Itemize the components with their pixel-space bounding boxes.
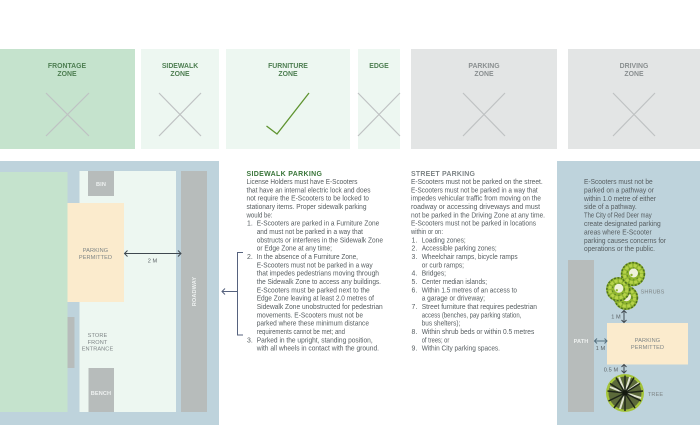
- arrow: 0.5 m tree clearance: 0.5 M: [604, 368, 618, 374]
- text block: sidewalk parking: movements. E-Scooters must not be: [257, 312, 363, 319]
- text block: street parking: Within 1.5 metres of an access to: [422, 287, 517, 294]
- text block: sidewalk parking: and must not be parked in a way that: [257, 229, 363, 236]
- text block: street parking: roadway or accessing driveways and must: [411, 204, 540, 211]
- text block: sidewalk parking: the Sidewalk Zone to access any buildings.: [257, 279, 381, 286]
- zone: parking: PARKING: [468, 63, 500, 70]
- text block: street parking: Bridges;: [422, 271, 446, 278]
- text block: street parking: Street furniture that requires pedestrian: [422, 304, 537, 311]
- heading: street parking: STREET PARKING: [411, 171, 476, 178]
- text block: street parking: within or on:: [410, 229, 443, 236]
- text block: street parking: 6.: [412, 287, 417, 294]
- bench: [88, 368, 114, 412]
- text block: sidewalk parking: Sidewalk Zone unobstructed for pedestrian: [257, 304, 383, 311]
- zone: furniture: ZONE: [278, 71, 298, 78]
- text block: street parking: Loading zones;: [422, 237, 466, 244]
- zone: sidewalk: [141, 49, 219, 149]
- text block: street parking: 7.: [412, 304, 417, 311]
- text block: sidewalk parking: Parked in the upright, standing position,: [257, 337, 373, 344]
- text block: street parking: Wheelchair ramps, bicycle ramps: [422, 254, 518, 261]
- text block: sidewalk parking: parked where these minimum distance: [257, 321, 369, 328]
- text block: sidewalk parking: E-Scooters are parked in a Furniture Zone: [257, 221, 379, 228]
- text block: pathway rules: parked on a pathway or: [584, 187, 655, 194]
- arrow: 2 m clearance: [124, 250, 181, 264]
- arrow: 2 m clearance: 2 M: [148, 258, 158, 264]
- zone: driving: DRIVING: [620, 63, 648, 70]
- bin: BIN: [96, 182, 106, 188]
- text block: street parking: not be parked in the Driving Zone at any time.: [411, 212, 545, 219]
- zone: frontage: FRONTAGE: [48, 63, 86, 70]
- text block: sidewalk parking: 1.: [247, 221, 253, 228]
- text block: sidewalk parking: 2.: [247, 254, 253, 261]
- text block: street parking: 3.: [412, 254, 417, 261]
- text block: sidewalk parking: License Holders must have E-Scooters: [246, 179, 358, 186]
- text block: pathway rules: within 1.0 metre of either: [583, 196, 657, 203]
- text block: pathway rules: areas where E-Scooter: [584, 229, 652, 236]
- bench: BENCH: [91, 391, 111, 397]
- text block: sidewalk parking: obstructs or interferes in the Sidewalk Zone: [257, 237, 383, 244]
- parking permitted area: PERMITTED: [631, 345, 664, 351]
- text block: sidewalk parking: or Edge Zone at any time;: [257, 246, 332, 253]
- arrow: bracket to diagram: [222, 252, 243, 335]
- arrow: 1 m path clearance: [594, 338, 607, 352]
- panel: sidewalk parking diagram: [0, 161, 219, 425]
- text block: street parking: of trees; or: [422, 337, 450, 344]
- text block: sidewalk parking: stationary items. Proper sidewalk parking: [246, 204, 367, 211]
- text block: pathway rules: E-Scooters must not be: [584, 179, 653, 186]
- zone: edge: EDGE: [369, 63, 389, 70]
- text block: street parking: Center median islands;: [422, 279, 487, 286]
- text block: street parking: 5.: [412, 279, 417, 286]
- roadway: [181, 171, 207, 412]
- text block: pathway rules: [583, 179, 667, 253]
- text block: sidewalk parking: In the absence of a Furniture Zone,: [257, 254, 358, 261]
- zone: driving: ZONE: [624, 71, 644, 78]
- text block: pathway rules: create designated parking: [584, 221, 661, 228]
- parking permitted area: [607, 323, 688, 364]
- text block: sidewalk parking: [246, 171, 383, 353]
- text block: street parking: 2.: [412, 246, 417, 253]
- text block: street parking: bus shelters);: [422, 321, 460, 328]
- store front entrance label: [82, 333, 113, 352]
- zone: furniture: FURNITURE: [268, 63, 308, 70]
- parking permitted area: [68, 203, 124, 302]
- text block: pathway rules: parking causes concerns for: [584, 238, 667, 245]
- text block: street parking: Within shrub beds or within 0.5 metres: [422, 329, 535, 336]
- store front entrance label: STORE: [88, 333, 108, 339]
- text block: sidewalk parking: not require the E-Scooters to be locked to: [246, 196, 369, 203]
- text block: sidewalk parking: requirements cannot be met; and: [257, 329, 345, 336]
- parking permitted area: PARKING: [83, 248, 108, 254]
- text block: street parking: Accessible parking zones;: [422, 246, 497, 253]
- text block: street parking: E-Scooters must not be parked in a way that: [411, 187, 538, 194]
- text block: sidewalk parking: that have an internal electric lock and does: [246, 187, 371, 194]
- arrow: 1 m shrub clearance: 1 M: [611, 314, 621, 320]
- icon: shrubs: [606, 262, 645, 310]
- parking permitted area: PARKING: [635, 338, 660, 344]
- text block: pathway rules: The City of Red Deer may: [584, 213, 652, 220]
- zone: parking: ZONE: [474, 71, 494, 78]
- text block: street parking: [410, 171, 545, 353]
- text block: sidewalk parking: that impedes pedestrians moving through: [257, 271, 379, 278]
- text block: sidewalk parking: E-Scooters must not be parked in a way: [257, 262, 373, 269]
- panel: pathway parking: [557, 161, 700, 425]
- zone: parking: [411, 49, 557, 149]
- text block: street parking: or curb ramps;: [422, 262, 464, 269]
- text block: pathway rules: operations or the public.: [584, 246, 655, 253]
- text block: street parking: 9.: [412, 346, 417, 353]
- text block: sidewalk parking: Edge Zone leaving at least 2.0 metres of: [257, 296, 374, 303]
- text block: street parking: E-Scooters must not be parked on the street.: [411, 179, 543, 186]
- text block: street parking: a garage or driveway;: [422, 296, 485, 303]
- sidewalk strip: [80, 171, 176, 412]
- arrow: 1 m shrub clearance: [611, 310, 626, 322]
- parking permitted area: PERMITTED: [79, 255, 112, 261]
- text block: street parking: Within City parking spaces.: [422, 346, 500, 353]
- store front entrance label: ENTRANCE: [82, 346, 113, 352]
- text block: street parking: impedes vehicular traffic from moving on the: [411, 196, 541, 203]
- zone: frontage: [0, 49, 135, 149]
- text block: street parking: E-Scooters must not be parked in locations: [411, 221, 537, 228]
- arrow: 1 m path clearance: 1 M: [596, 346, 606, 352]
- icon: tree: [606, 374, 644, 412]
- path: PATH: [574, 339, 588, 345]
- zone: furniture: [226, 49, 350, 149]
- zone: sidewalk: ZONE: [170, 71, 190, 78]
- zone: driving: [568, 49, 700, 149]
- store front door: [68, 317, 74, 368]
- arrow: 0.5 m tree clearance: [604, 364, 626, 374]
- text block: street parking: 1.: [412, 237, 417, 244]
- text block: sidewalk parking: with all wheels in contact with the ground.: [256, 346, 379, 353]
- text block: sidewalk parking: E-Scooters must be parked next to the: [257, 287, 370, 294]
- text block: street parking: 8.: [412, 329, 417, 336]
- text block: street parking: access (benches, pay parking station,: [422, 312, 521, 319]
- label: shrubs: SHRUBS: [641, 290, 665, 296]
- label: tree: TREE: [648, 392, 663, 398]
- text block: sidewalk parking: would be:: [246, 212, 273, 219]
- zone: edge: [358, 49, 400, 149]
- bin: [88, 171, 114, 196]
- zone: sidewalk: SIDEWALK: [162, 63, 198, 70]
- text block: pathway rules: side of a pathway.: [584, 204, 637, 211]
- frontage area: [0, 172, 68, 412]
- zone: frontage: ZONE: [57, 71, 77, 78]
- roadway: ROADWAY: [192, 277, 198, 306]
- heading: sidewalk parking: SIDEWALK PARKING: [246, 171, 323, 178]
- store front entrance label: FRONT: [88, 340, 108, 346]
- text block: sidewalk parking: 3.: [247, 337, 253, 344]
- text block: street parking: 4.: [412, 271, 417, 278]
- path: [568, 260, 594, 412]
